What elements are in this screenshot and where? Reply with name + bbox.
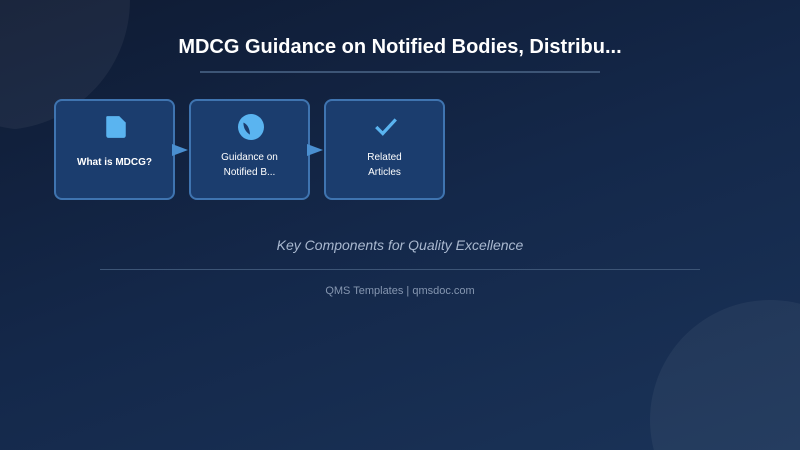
icon: document (106, 116, 126, 138)
subtitle: Key Components for Quality Excellence (277, 237, 523, 253)
panel: what is MDCG: What is MDCG? (77, 157, 152, 168)
footer: QMS Templates | qmsdoc.com (325, 285, 475, 297)
panel: guidance: Notified B... (224, 167, 275, 178)
panel: what is MDCG (54, 99, 175, 200)
panel: related: Articles (368, 167, 401, 178)
arrow 2 (307, 144, 323, 156)
panel: related (324, 99, 445, 200)
panel: related: Related (367, 152, 402, 163)
arrow 1 (172, 144, 188, 156)
icon: globe (238, 114, 264, 140)
title: MDCG Guidance on Notified Bodies, Distribu... (178, 36, 622, 58)
icon: check (375, 118, 397, 136)
panel: guidance: Guidance on (221, 152, 278, 163)
panel: guidance (189, 99, 310, 200)
